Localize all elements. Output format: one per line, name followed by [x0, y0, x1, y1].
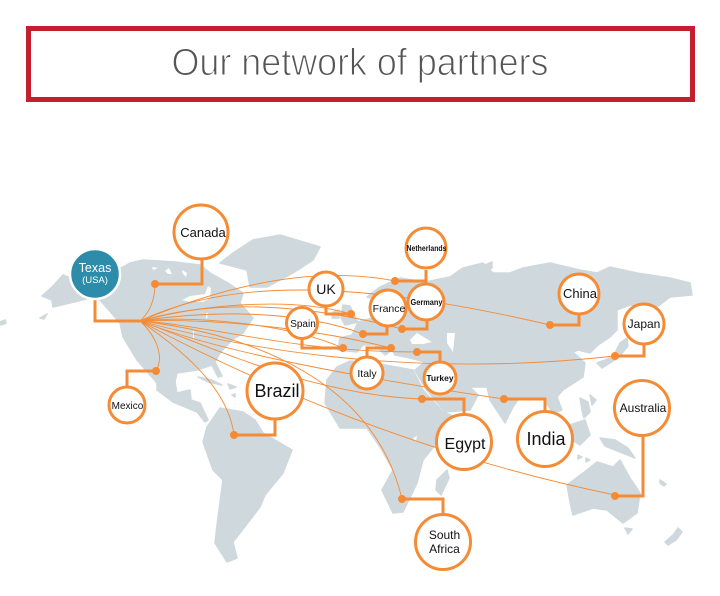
connector: South Africa — [400, 496, 443, 514]
node: Netherlands: Netherlands — [406, 244, 447, 253]
node: China — [559, 274, 599, 314]
connector: Netherlands — [392, 270, 426, 284]
node: Egypt — [436, 414, 492, 470]
node: France — [370, 290, 406, 326]
connector: UK — [326, 306, 354, 316]
node: Japan — [624, 304, 664, 344]
node: Egypt: Egypt — [445, 436, 486, 453]
node: Australia — [614, 380, 670, 436]
node: Spain: Spain — [290, 319, 316, 330]
node: France: France — [373, 303, 405, 315]
node: Turkey: Turkey — [426, 373, 454, 383]
connector: France — [360, 326, 387, 336]
node: India — [518, 412, 572, 466]
node: Canada: Canada — [180, 225, 227, 240]
node: Brazil — [247, 363, 303, 419]
node: Japan: Japan — [628, 317, 660, 331]
node: Texas — [70, 249, 120, 299]
node: Germany: Germany — [410, 297, 443, 307]
node: South Africa: South — [429, 528, 460, 542]
node: Mexico — [109, 387, 145, 423]
connector: Spain — [302, 338, 346, 350]
node: Italy: Italy — [357, 368, 377, 380]
node: UK: UK — [316, 281, 336, 297]
node: Germany — [408, 284, 444, 320]
node: Texas: Texas — [79, 261, 111, 275]
white details on map — [152, 267, 455, 441]
node: India: India — [526, 429, 566, 449]
connector: Japan — [612, 345, 644, 358]
node: Spain — [286, 308, 318, 338]
connector: Germany — [400, 320, 427, 332]
connector: Mexico — [127, 368, 158, 387]
node: Texas: (USA) — [82, 275, 108, 286]
node: UK — [309, 272, 343, 306]
node: Italy — [351, 357, 383, 389]
node: China: China — [563, 286, 598, 301]
connector: Brazil — [232, 420, 275, 438]
node: Canada — [174, 205, 228, 259]
connector: India — [502, 396, 545, 413]
node: South Africa — [416, 514, 470, 570]
connector: Australia — [612, 437, 643, 498]
connector: Italy — [367, 346, 394, 357]
node: Netherlands — [406, 228, 447, 268]
connector: Canada — [152, 259, 202, 286]
connector: Egypt — [420, 396, 464, 413]
node: Mexico: Mexico — [112, 401, 144, 412]
connector: China — [548, 315, 579, 328]
connector: Texas — [95, 300, 140, 321]
world map — [0, 235, 692, 562]
connection curves — [140, 275, 615, 499]
node: Brazil: Brazil — [254, 381, 300, 401]
title: Our network of partners — [172, 42, 548, 84]
node: South Africa: Africa — [429, 542, 460, 556]
node: Australia: Australia — [620, 401, 667, 415]
title box — [28, 28, 692, 100]
node: Turkey — [424, 362, 456, 394]
connector: Turkey — [414, 350, 440, 361]
